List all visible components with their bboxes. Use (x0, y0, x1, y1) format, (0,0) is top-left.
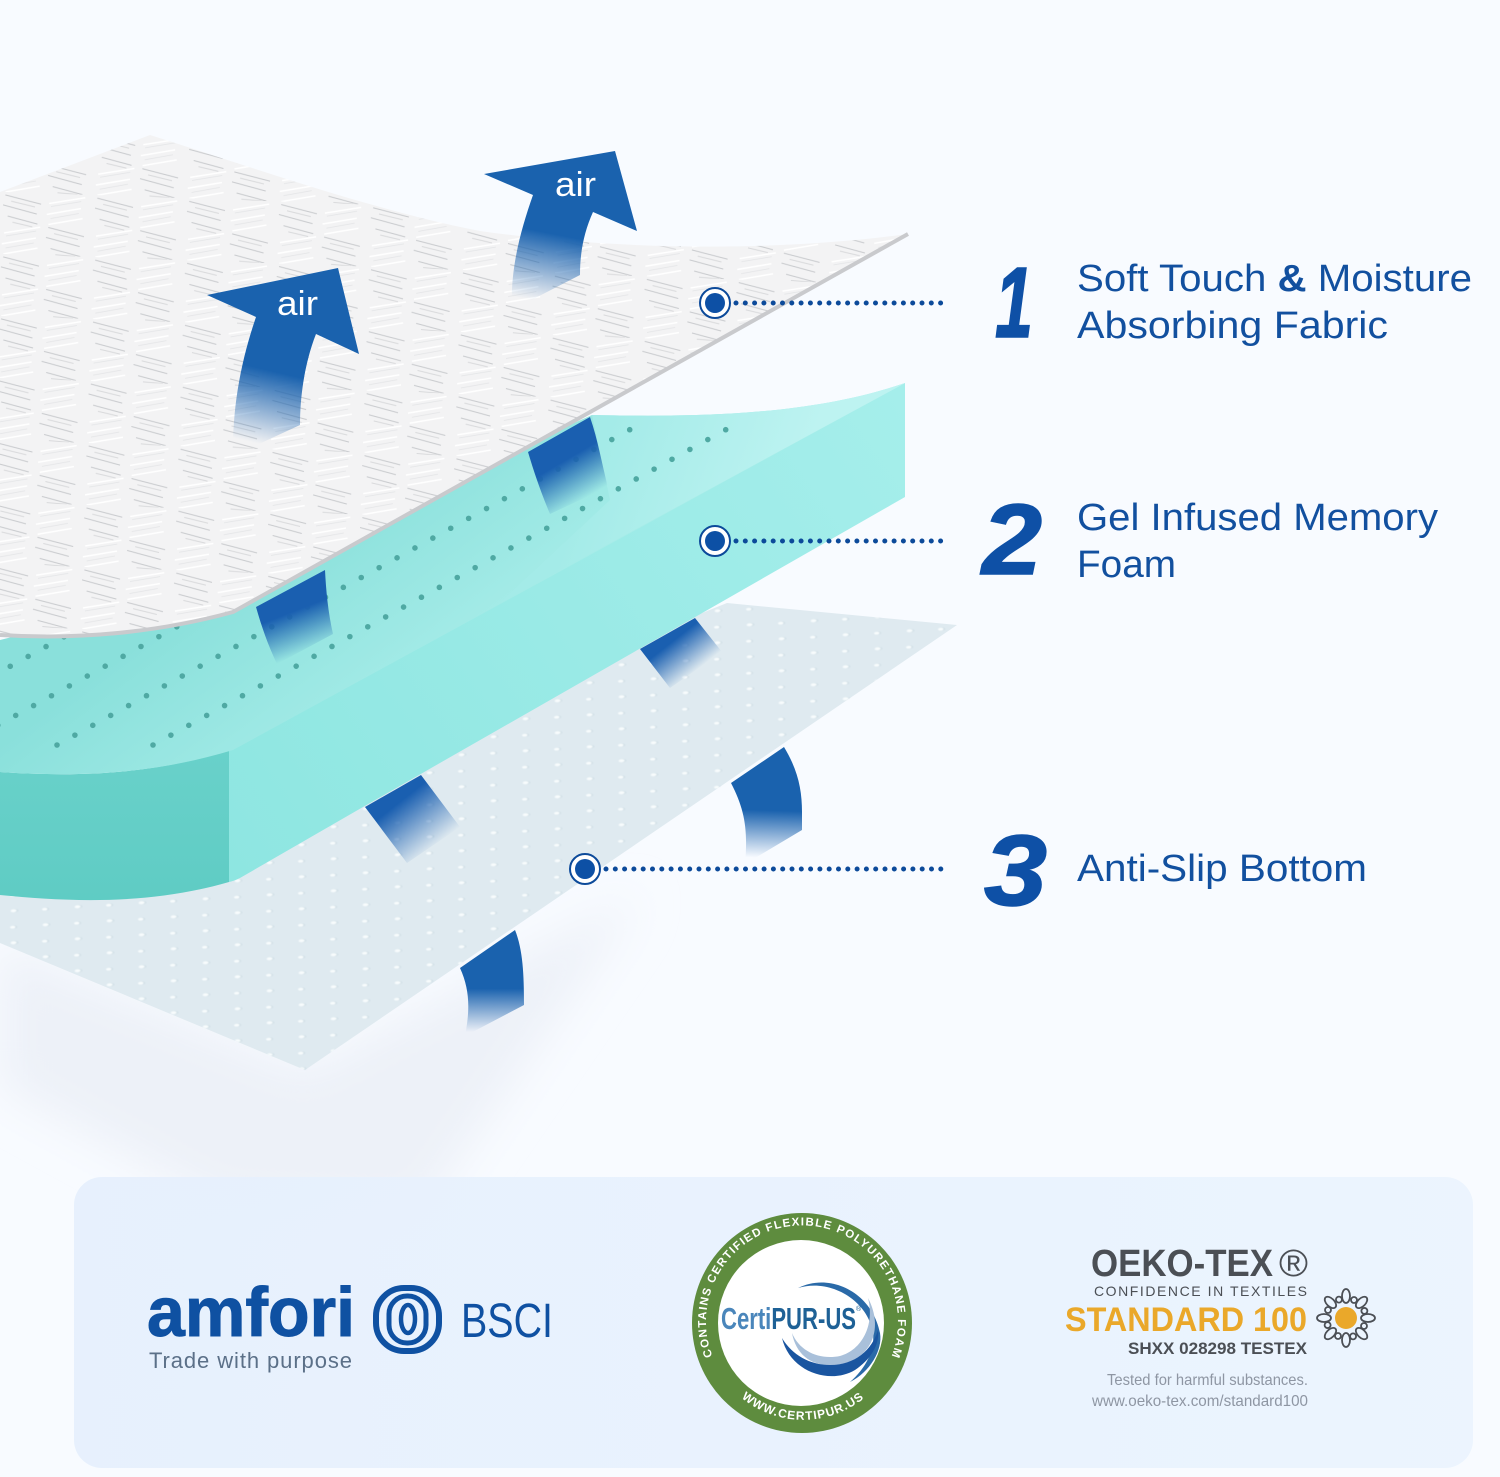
icon: amfori rings (376, 1288, 439, 1351)
logo: CertiPUR-US seal: ® (856, 1305, 862, 1313)
callout marker 3 (570, 854, 943, 884)
airflow arrow segment on sheet right (640, 618, 722, 688)
foam top surface (0, 383, 905, 774)
label 1: 1 (995, 247, 1033, 359)
logo: OEKO-TEX Standard 100: OEKO-TEX (1091, 1243, 1274, 1285)
logo: OEKO-TEX Standard 100 (1065, 1243, 1375, 1410)
shadow beneath layers (0, 895, 640, 1215)
logo: CertiPUR-US seal: CONTAINS CERTIFIED FLEXIBLE POLYURETHANE FOAM (698, 1218, 906, 1358)
air arrow right (484, 151, 637, 310)
airflow arrow segment on foam right (528, 417, 608, 514)
foam right side (229, 383, 905, 882)
air arrow left: air (277, 285, 318, 323)
logo: CertiPUR-US seal: CertiPUR-US (721, 1301, 856, 1336)
layer 1: soft touch fabric (0, 135, 908, 636)
label 1: Soft Touch & Moisture (1077, 258, 1472, 300)
label 2: Gel Infused Memory (1077, 497, 1438, 539)
logo: amfori BSCI: BSCI (461, 1295, 553, 1348)
airflow arrow segment below sheet left (460, 930, 524, 1036)
label 3: 3 (984, 815, 1047, 927)
label 1 (995, 247, 1472, 359)
icon: globe flower (1317, 1289, 1375, 1347)
logo: OEKO-TEX Standard 100: www.oeko-tex.com/standard100 (1091, 1393, 1308, 1410)
layer 2: gel infused memory foam (0, 383, 905, 900)
callout marker 2 (700, 526, 943, 556)
fabric grey edge (0, 234, 908, 636)
logo: OEKO-TEX Standard 100: STANDARD 100 (1065, 1301, 1307, 1339)
air arrow left (207, 268, 359, 456)
airflow arrow segment below sheet right (731, 747, 802, 864)
logo: CertiPUR-US seal: WWW.CERTIPUR.US (743, 1391, 863, 1420)
foam perforation dots (0, 429, 727, 745)
label 2: 2 (980, 484, 1042, 596)
air arrow right: air (555, 166, 596, 204)
logo: CertiPUR-US seal (692, 1213, 912, 1433)
foam top surface light wedge (500, 383, 905, 603)
label 3: Anti-Slip Bottom (1077, 848, 1367, 890)
logo: OEKO-TEX Standard 100: SHXX 028298 TESTEX (1128, 1339, 1308, 1358)
logo: OEKO-TEX Standard 100: CONFIDENCE IN TEXTILES (1094, 1283, 1307, 1299)
airflow arrow segment on foam left (256, 570, 333, 664)
airflow arrow segment on foam side (365, 775, 460, 863)
layer 3: anti-slip bottom sheet (0, 603, 957, 1070)
label 3 (984, 815, 1367, 927)
label 1: Absorbing Fabric (1077, 305, 1388, 347)
callout marker 1 (700, 288, 943, 318)
panel: certifications (74, 1177, 1473, 1468)
label 2 (980, 484, 1438, 596)
logo: amfori BSCI: Trade with purpose (149, 1348, 352, 1373)
logo: amfori BSCI: amfori (147, 1273, 355, 1351)
icon: swoosh (782, 1282, 880, 1382)
foam front side (0, 750, 229, 900)
logo: OEKO-TEX Standard 100: ® (1279, 1243, 1308, 1285)
logo: amfori BSCI (147, 1273, 553, 1373)
logo: OEKO-TEX Standard 100: Tested for harmful substances. (1107, 1372, 1308, 1389)
label 2: Foam (1077, 544, 1176, 586)
